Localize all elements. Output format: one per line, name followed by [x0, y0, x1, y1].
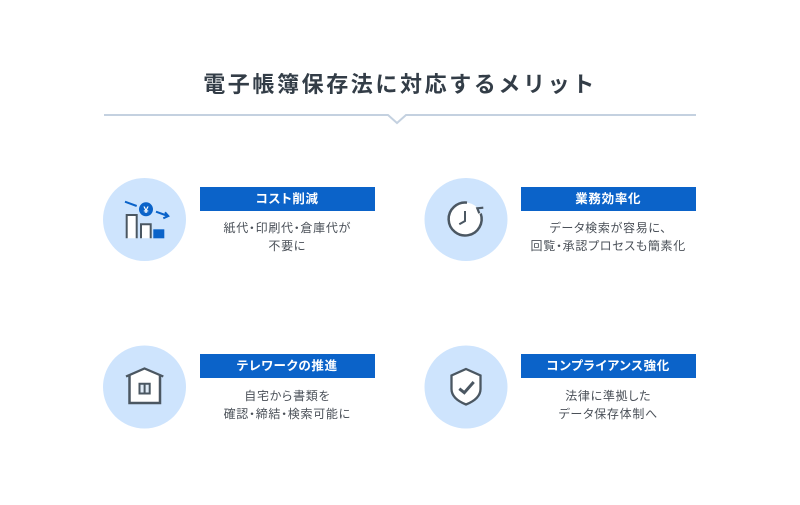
icon: shield	[424, 346, 508, 428]
panel: cost	[103, 178, 375, 261]
icon: clock	[424, 178, 508, 261]
text: cost	[224, 221, 351, 253]
heading: compliance	[521, 354, 696, 378]
text: cost: 不要に	[268, 239, 306, 253]
panel: efficiency	[424, 178, 696, 261]
text: efficiency: 回覧・承認プロセスも簡素化	[531, 239, 686, 253]
heading: telework: テレワークの推進	[237, 359, 338, 373]
heading: compliance: コンプライアンス強化	[546, 359, 670, 373]
heading: efficiency	[521, 187, 696, 211]
text: telework	[224, 389, 351, 421]
heading: cost: コスト削減	[256, 192, 319, 206]
text: telework: 自宅から書類を	[244, 389, 330, 403]
text: compliance	[559, 389, 658, 421]
text: efficiency: データ検索が容易に、	[550, 221, 667, 235]
icon: house	[103, 346, 186, 428]
title divider with notch	[104, 114, 696, 124]
icon: cost reduction chart	[103, 178, 186, 261]
panel: compliance	[424, 346, 696, 428]
icon: cost reduction chart: ¥	[143, 205, 149, 216]
text: cost: 紙代・印刷代・倉庫代が	[224, 221, 351, 235]
heading: cost	[200, 187, 374, 211]
title: 電子帳簿保存法に対応するメリット	[203, 72, 597, 97]
text: compliance: 法律に準拠した	[565, 389, 651, 403]
text: compliance: データ保存体制へ	[559, 407, 658, 421]
heading: telework	[200, 354, 374, 378]
text: telework: 確認・締結・検索可能に	[224, 407, 351, 421]
panel: telework	[103, 346, 375, 428]
text: efficiency	[531, 221, 686, 253]
heading: efficiency: 業務効率化	[575, 192, 641, 206]
